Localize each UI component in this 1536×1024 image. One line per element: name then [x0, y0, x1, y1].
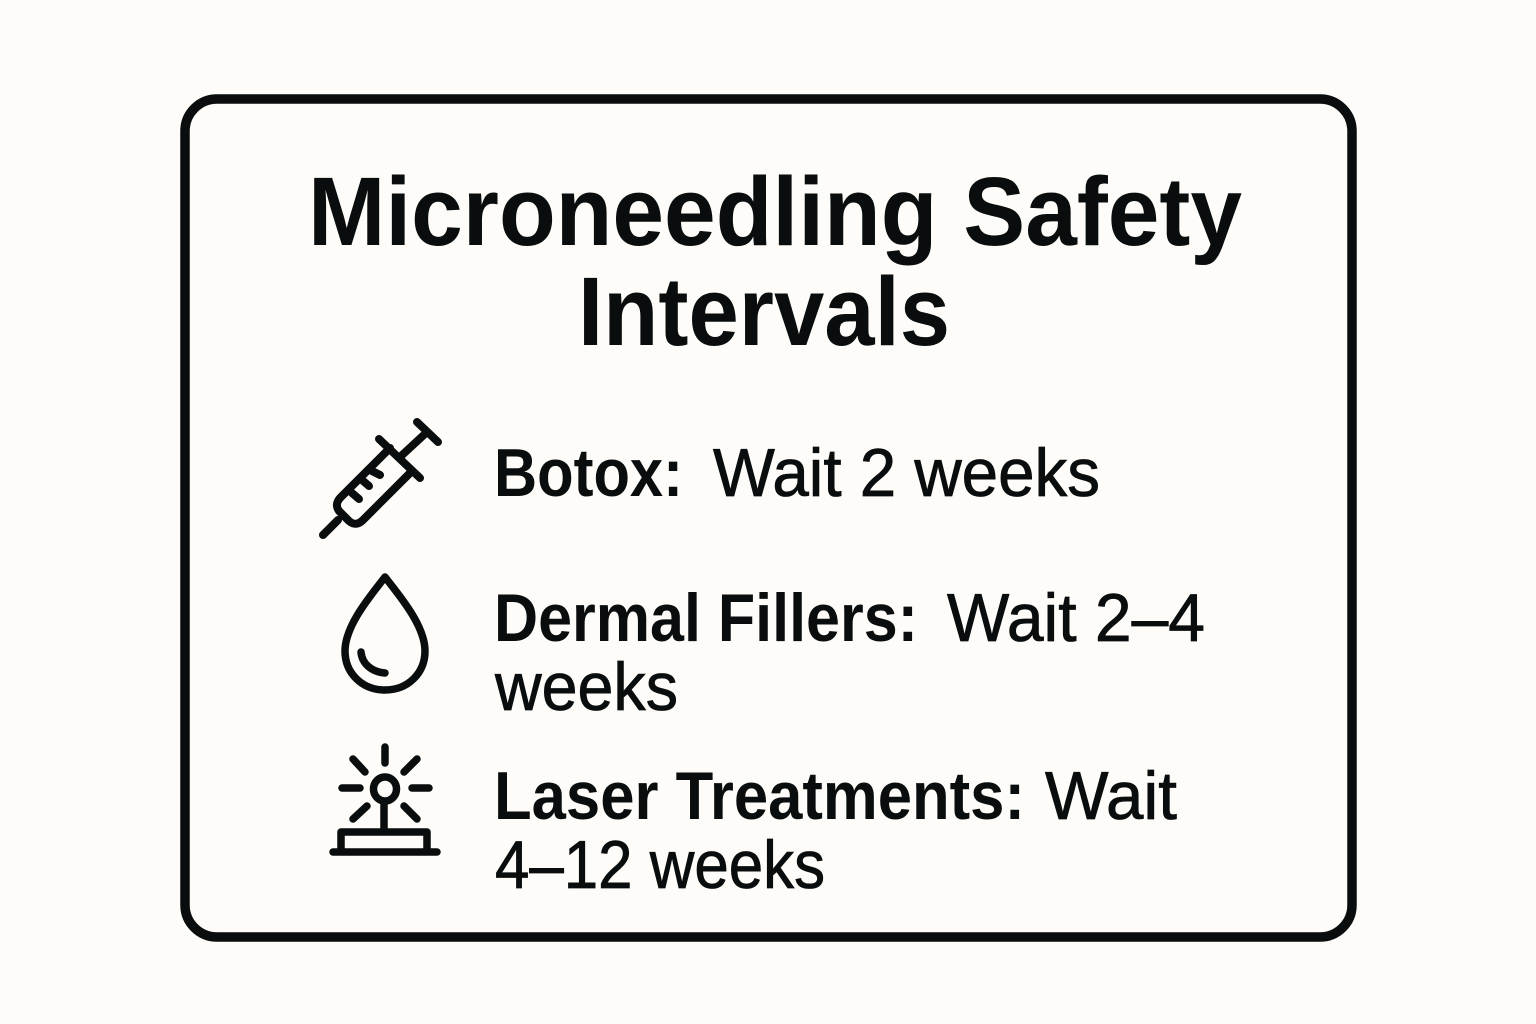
icon: syringe: [323, 422, 438, 535]
text: Laser Treatments interval: 4–12 weeks: [495, 827, 825, 903]
text: Laser Treatments interval: [494, 758, 1177, 903]
text: Laser Treatments interval: Laser Treatments:: [494, 758, 1025, 834]
text: Botox interval: Wait 2 weeks: [713, 435, 1100, 511]
text: Dermal Fillers interval: weeks: [494, 649, 678, 725]
text: Laser Treatments interval: Wait: [1045, 758, 1177, 834]
text: Botox interval: Botox:: [494, 435, 683, 511]
title: Microneedling Safety: [308, 157, 1242, 266]
title: [308, 157, 1242, 366]
text: Dermal Fillers interval: [494, 580, 1205, 725]
icon: laser device: [333, 747, 437, 852]
text: Dermal Fillers interval: Dermal Fillers:: [494, 580, 918, 656]
text: Dermal Fillers interval: Wait 2–4: [947, 580, 1205, 656]
panel: rounded border: [185, 99, 1352, 937]
icon: water drop: [345, 577, 425, 690]
title: Intervals: [578, 257, 950, 366]
text: Botox interval: [494, 435, 1100, 511]
